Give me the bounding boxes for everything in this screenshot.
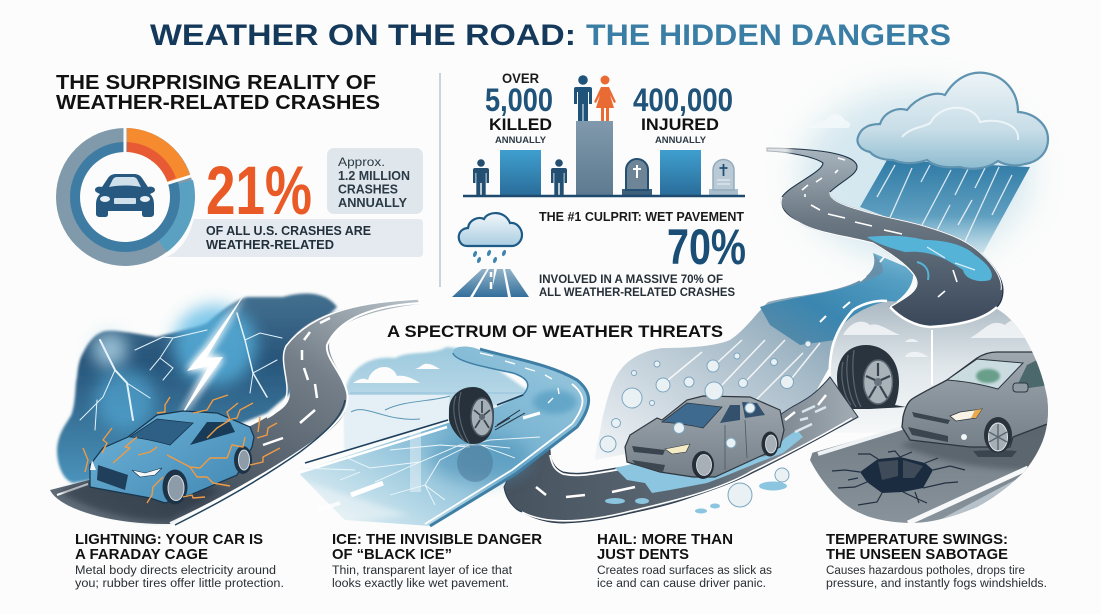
stat: 400,000 injured	[633, 82, 733, 145]
rain	[860, 160, 1030, 253]
icon: man on pillar	[574, 75, 592, 121]
splash	[615, 430, 803, 493]
icon: gravestone dark	[622, 159, 652, 196]
bar chart: pictogram bars	[500, 121, 701, 196]
stat: over 5,000 killed: 5,000	[485, 82, 553, 118]
wet road	[767, 148, 1003, 327]
tire reflection	[457, 444, 493, 482]
caption: temperature swings	[826, 531, 1047, 590]
callout: 1.2 million crashes: ANNUALLY	[338, 196, 408, 210]
icon: gravestone light	[709, 160, 738, 196]
callout: 1.2 million crashes: 1.2 MILLION	[338, 169, 410, 183]
donut chart: 21 percent	[56, 128, 195, 266]
panel: wet pavement culprit	[452, 210, 746, 299]
cracks	[300, 437, 540, 505]
pothole	[832, 451, 965, 505]
caption: lightning: A FARADAY CAGE	[75, 546, 208, 563]
caption: temperature swings: THE UNSEEN SABOTAGE	[826, 546, 1008, 563]
big number: 21%: 21%	[206, 152, 312, 229]
stat: over 5,000 killed	[485, 71, 553, 145]
caption: hail: HAIL: MORE THAN	[597, 531, 733, 548]
caption: ice: Thin, transparent layer of ice that	[332, 565, 513, 577]
icon: rain cloud over road	[452, 213, 529, 297]
stat: over 5,000 killed: OVER	[502, 71, 539, 86]
road surface	[298, 347, 589, 526]
blue car	[60, 411, 254, 520]
electric sparks	[83, 395, 280, 503]
rain streaks	[668, 340, 820, 403]
stat: over 5,000 killed: KILLED	[489, 116, 552, 134]
storm cloud	[858, 73, 1048, 169]
blue halo	[800, 90, 1030, 260]
heading: number one culprit: THE #1 CULPRIT: WET PAVEMENT	[539, 210, 744, 224]
caption: temperature swings: Causes hazardous potholes, drops tire	[826, 565, 1025, 577]
title: THE HIDDEN DANGERS	[586, 19, 951, 52]
lightning bolt	[176, 290, 247, 424]
road	[50, 299, 420, 524]
stat: over 5,000 killed: ANNUALLY	[495, 135, 546, 145]
dunes	[345, 395, 450, 452]
caption: lightning	[75, 531, 284, 590]
hailstones	[600, 341, 811, 507]
car with fogged windshield	[902, 352, 1050, 457]
heading: spectrum of weather threats: A SPECTRUM OF WEATHER THREATS	[387, 322, 723, 341]
heading: surprising reality: THE SURPRISING REALITY OF	[56, 71, 376, 94]
illustration: big cloud and wet road	[755, 73, 1048, 327]
caption: temperature swings: TEMPERATURE SWINGS:	[826, 531, 1008, 548]
road edges	[430, 349, 589, 526]
storm background	[57, 293, 337, 483]
icon: car front	[95, 174, 155, 217]
callout: 1.2 million crashes: CRASHES	[338, 182, 398, 196]
caption: ice: OF “BLACK ICE”	[332, 546, 452, 563]
small cloud	[805, 114, 850, 128]
title	[150, 19, 951, 52]
illustration: lightning on the road	[50, 290, 420, 525]
illustration: ice panel	[298, 347, 589, 526]
panel: killed and injured stats	[463, 71, 745, 196]
stat: 400,000 injured: INJURED	[641, 116, 719, 134]
caption: lightning: Metal body directs electricity around	[75, 565, 276, 577]
caption: ice: ICE: THE INVISIBLE DANGER	[332, 531, 542, 548]
icon: person left	[473, 159, 489, 196]
big number: 70%: 70%	[667, 219, 746, 275]
icon: woman on pillar	[594, 76, 616, 121]
callout: 1.2 million crashes: Approx.	[338, 155, 385, 169]
callout: 1.2 million crashes	[327, 148, 423, 214]
caption: hail: JUST DENTS	[597, 546, 689, 563]
sky	[345, 347, 530, 450]
panel: surprising reality of crashes	[56, 71, 423, 266]
illustration: temperature swings	[805, 298, 1055, 530]
stat bar: of all US crashes: WEATHER-RELATED	[206, 238, 334, 252]
illustration: hail background and river	[595, 253, 913, 460]
heading: surprising reality: WEATHER-RELATED CRASHES	[56, 91, 380, 114]
illustration: hail	[504, 340, 858, 523]
road	[504, 377, 858, 523]
text: involved in 70 percent	[539, 272, 735, 299]
stat: 400,000 injured: 400,000	[633, 82, 733, 118]
icon: person middle	[551, 159, 567, 196]
caption: lightning: you; rubber tires offer little protection.	[75, 578, 284, 590]
stat: 400,000 injured: ANNUALLY	[655, 135, 706, 145]
caption: ice: looks exactly like wet pavement.	[332, 578, 509, 590]
lane dashes	[480, 353, 559, 403]
caption: hail: ice and can cause driver panic.	[597, 578, 766, 590]
flat tire	[837, 345, 906, 409]
caption: temperature swings: pressure, and instantly fogs windshields.	[826, 578, 1047, 590]
text: involved in 70 percent: INVOLVED IN A MASSIVE 70% OF	[539, 272, 723, 286]
heading: surprising reality	[56, 71, 380, 114]
grey car	[625, 396, 784, 479]
caption: lightning: LIGHTNING: YOUR CAR IS	[75, 531, 263, 548]
puddle	[867, 236, 992, 281]
caption: hail: Creates road surfaces as slick as	[597, 565, 772, 577]
caption: hail	[597, 531, 772, 590]
text: involved in 70 percent: ALL WEATHER-RELATED CRASHES	[539, 285, 735, 299]
caption: ice	[332, 531, 542, 590]
stat bar: of all US crashes: OF ALL U.S. CRASHES ARE	[206, 224, 371, 238]
stat bar: of all US crashes	[167, 219, 423, 257]
title: WEATHER ON THE ROAD:	[150, 19, 576, 52]
icon: tire on ice	[449, 387, 494, 444]
